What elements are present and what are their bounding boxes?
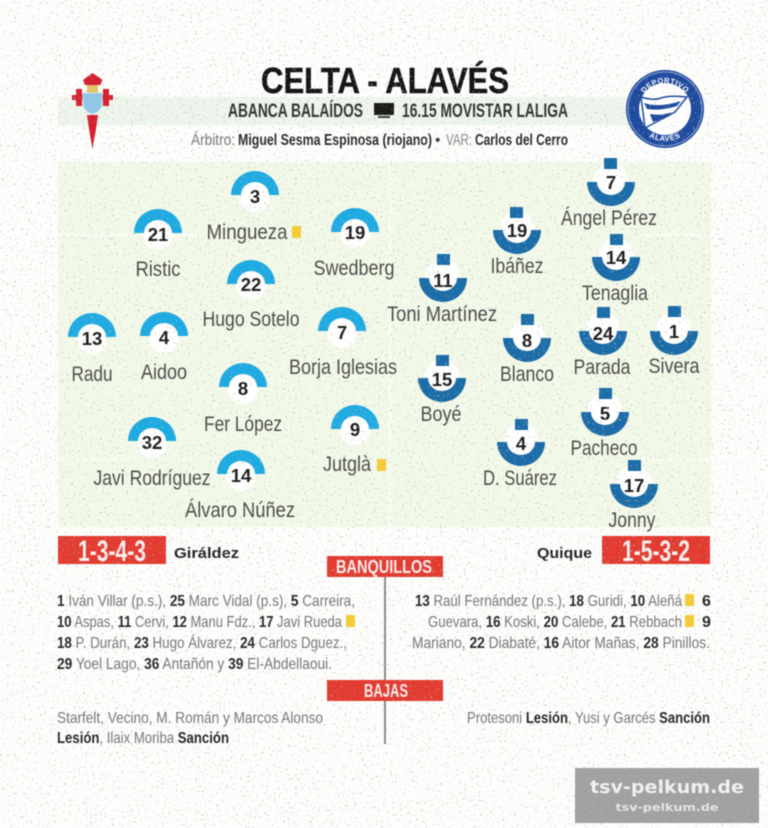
title: CELTA - ALAVÉS xyxy=(261,60,509,101)
text block: Alavés substitutes: 6 xyxy=(702,593,711,610)
panel: football pitch xyxy=(58,162,711,527)
text block: Celta absences xyxy=(57,710,323,747)
player 1 Sivera xyxy=(648,306,700,378)
match venue and broadcaster: 16.15 MOVISTAR LALIGA xyxy=(402,101,568,122)
player 4 Aidoo: Aidoo xyxy=(141,361,187,384)
text block: Alavés substitutes xyxy=(412,593,711,652)
match venue and broadcaster: ABANCA BALAÍDOS xyxy=(228,100,363,122)
text block: Alavés substitutes: 13 Raúl Fernández (p.s.), 18 Guridi, 10 Aleñá xyxy=(415,593,682,610)
player 4 D. Suárez: 4 xyxy=(516,433,527,454)
player 3 Mingueza xyxy=(206,171,301,244)
officials line xyxy=(191,132,568,149)
player 22 Hugo Sotelo: Hugo Sotelo xyxy=(202,308,300,331)
player 14 Álvaro Núñez xyxy=(185,450,295,522)
player 21 Ristic: 21 xyxy=(148,224,168,245)
text block: Celta substitutes: 1 Iván Villar (p.s.), 25 Marc Vidal (p.s), 5 Carreira, xyxy=(57,593,355,610)
player 1 Sivera: 1 xyxy=(669,321,679,342)
player 11 Toni Martínez: 11 xyxy=(433,270,453,291)
player 32 Javi Rodríguez: Javi Rodríguez xyxy=(94,467,210,490)
heading: bajas: BAJAS xyxy=(364,681,408,701)
player 8 Blanco xyxy=(500,314,554,386)
player 3 Mingueza: Mingueza xyxy=(206,221,288,244)
heading: banquillos: BANQUILLOS xyxy=(336,557,432,577)
Celta coach: Giráldez xyxy=(174,546,239,562)
player 7 Ángel Pérez: Ángel Pérez xyxy=(561,207,657,230)
player 4 Aidoo: 4 xyxy=(159,327,170,348)
player 8 Blanco: 8 xyxy=(522,330,532,351)
player 9 Jutglà: 9 xyxy=(350,419,360,440)
officials line: Carlos del Cerro xyxy=(475,132,568,149)
centre divider xyxy=(384,577,386,744)
Alavés coach: Quique xyxy=(537,546,592,562)
player 22 Hugo Sotelo xyxy=(202,260,300,331)
player 8 Fer López: Fer López xyxy=(204,413,282,436)
player 4 Aidoo xyxy=(140,312,188,384)
player 5 Pacheco xyxy=(570,388,638,460)
player 9 Jutglà xyxy=(323,405,386,476)
player 19 Swedberg: 19 xyxy=(345,222,365,243)
player 7 Borja Iglesias xyxy=(289,307,397,379)
player 21 Ristic: Ristic xyxy=(136,258,180,281)
player 17 Jonny: Jonny xyxy=(608,509,656,532)
player 24 Parada xyxy=(574,307,631,379)
panel: Alavés players xyxy=(387,158,700,532)
player 14 Álvaro Núñez: Álvaro Núñez xyxy=(185,499,295,522)
player 15 Boyé xyxy=(418,355,466,426)
match venue and broadcaster xyxy=(228,100,568,122)
text block: Celta substitutes: 18 P. Durán, 23 Hugo Álvarez, 24 Carlos Dguez., xyxy=(57,633,347,652)
player 14 Tenaglia xyxy=(582,234,648,305)
player 32 Javi Rodríguez xyxy=(94,417,210,490)
watermark xyxy=(575,768,759,823)
player 7 Ángel Pérez xyxy=(561,158,657,230)
player 13 Radu: 13 xyxy=(82,328,102,349)
text block: Celta substitutes xyxy=(57,593,355,673)
player 7 Borja Iglesias: Borja Iglesias xyxy=(289,356,397,379)
Alavés formation badge: 1-5-3-2 xyxy=(622,535,690,568)
player 1 Sivera: Sivera xyxy=(648,355,700,378)
text block: Alavés absences: Protesoni Lesión, Yusi y Garcés Sanción xyxy=(467,710,710,727)
player 22 Hugo Sotelo: 22 xyxy=(241,274,261,295)
player 7 Ángel Pérez: 7 xyxy=(606,172,616,193)
player 5 Pacheco: Pacheco xyxy=(570,437,638,460)
icon: Alavés crest xyxy=(625,69,705,149)
player 19 Ibáñez xyxy=(490,207,544,278)
player 24 Parada: 24 xyxy=(593,323,614,344)
icon: Alavés crest: DEPORTIVO xyxy=(640,77,689,94)
player 15 Boyé: 15 xyxy=(432,369,452,390)
heading: bajas xyxy=(327,680,443,701)
player 19 Ibáñez: Ibáñez xyxy=(490,255,544,278)
player 14 Tenaglia: 14 xyxy=(606,247,627,268)
player 19 Swedberg: Swedberg xyxy=(314,257,394,280)
player 17 Jonny xyxy=(608,460,658,532)
player 11 Toni Martínez xyxy=(387,254,497,326)
icon: television xyxy=(374,103,394,118)
text block: Alavés substitutes: Guevara, 16 Koski, 20 Calebe, 21 Rebbach xyxy=(428,614,682,631)
officials line: Árbitro: xyxy=(191,132,235,149)
officials line: Miguel Sesma Espinosa (riojano) xyxy=(238,132,432,149)
player 17 Jonny: 17 xyxy=(624,475,644,496)
text block: Celta absences: Lesión, Ilaix Moriba Sanción xyxy=(57,730,229,747)
icon: Alavés crest: ALAVÉS xyxy=(648,132,680,142)
player 7 Borja Iglesias: 7 xyxy=(337,322,347,343)
text block: Celta substitutes: 10 Aspas, 11 Cervi, 12 Manu Fdz., 17 Javi Rueda xyxy=(57,614,342,631)
player 13 Radu: Radu xyxy=(72,363,112,386)
player 9 Jutglà: Jutglà xyxy=(323,453,371,476)
officials line: • xyxy=(435,132,440,149)
player 14 Tenaglia: Tenaglia xyxy=(582,282,648,305)
text block: Alavés substitutes: Mariano, 22 Diabaté, 16 Aitor Mañas, 28 Pinillos. xyxy=(412,635,710,652)
watermark: tsv-pelkum.de xyxy=(590,777,744,798)
watermark: tsv-pelkum.de xyxy=(616,801,718,814)
player 5 Pacheco: 5 xyxy=(600,403,610,424)
header ribbon xyxy=(58,97,630,125)
player 8 Blanco: Blanco xyxy=(500,363,554,386)
panel: Celta players xyxy=(68,171,397,522)
player 32 Javi Rodríguez: 32 xyxy=(142,432,162,453)
player 8 Fer López xyxy=(204,363,282,436)
text block: Celta absences: Starfelt, Vecino, M. Román y Marcos Alonso xyxy=(57,710,323,727)
player 3 Mingueza: 3 xyxy=(250,186,260,207)
player 11 Toni Martínez: Toni Martínez xyxy=(387,303,497,326)
player 15 Boyé: Boyé xyxy=(420,403,462,426)
player 19 Swedberg xyxy=(314,208,394,280)
player 24 Parada: Parada xyxy=(574,356,631,379)
text block: Alavés substitutes: 9 xyxy=(702,614,711,631)
player 4 D. Suárez: D. Suárez xyxy=(483,467,557,490)
officials line: VAR: xyxy=(446,132,472,149)
text block: Celta substitutes: 29 Yoel Lago, 36 Antañón y 39 El-Abdellaoui. xyxy=(57,656,332,673)
Celta formation badge: 1-3-4-3 xyxy=(78,535,146,568)
player 13 Radu xyxy=(68,313,116,386)
icon: Celta crest xyxy=(72,73,113,149)
player 4 D. Suárez xyxy=(483,419,557,490)
player 21 Ristic xyxy=(134,209,182,281)
player 14 Álvaro Núñez: 14 xyxy=(231,465,252,486)
player 19 Ibáñez: 19 xyxy=(507,220,527,241)
player 8 Fer López: 8 xyxy=(238,378,248,399)
